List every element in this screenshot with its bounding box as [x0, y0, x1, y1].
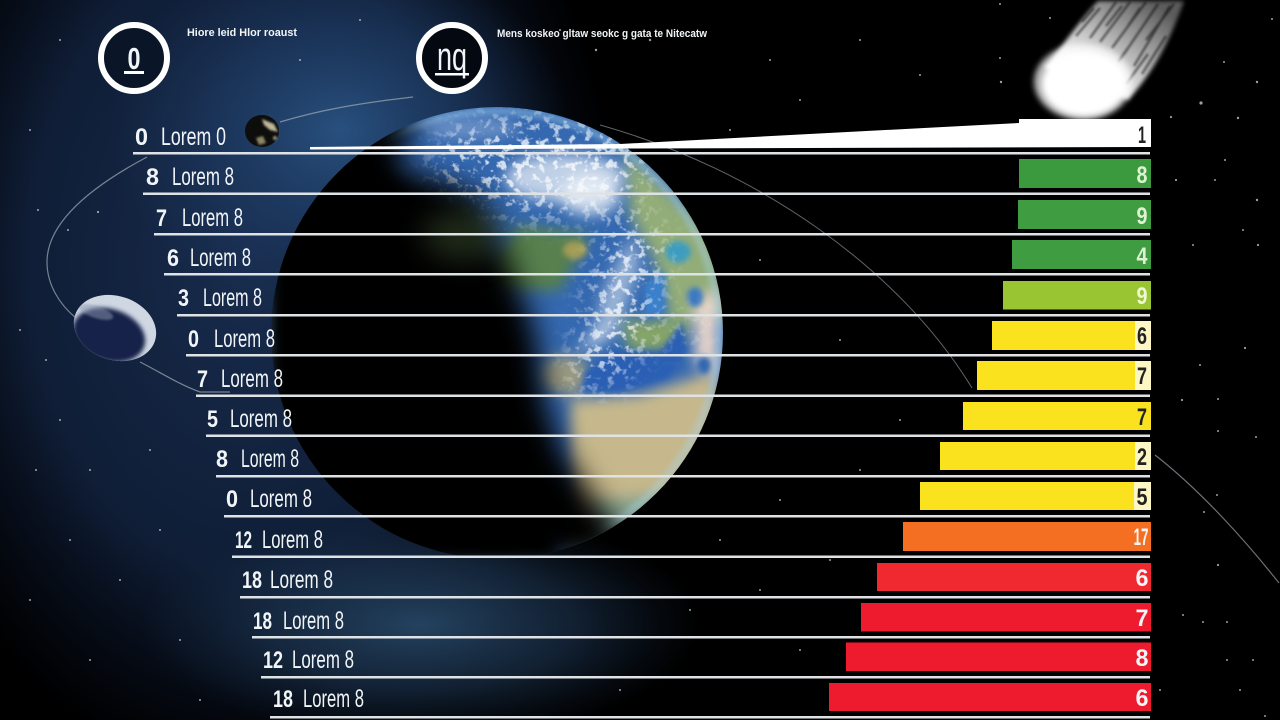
row 3: 9: [1136, 203, 1148, 230]
row 7: 7: [197, 366, 208, 393]
row 13: Lorem 8: [283, 607, 344, 635]
row 9: [216, 442, 1151, 478]
row 4: Lorem 8: [190, 244, 251, 272]
row 8: 7: [1137, 404, 1147, 431]
row 7: Lorem 8: [221, 365, 283, 393]
row 1: 1: [1138, 122, 1146, 149]
row 1: [133, 119, 1151, 154]
row 5: Lorem 8: [203, 284, 262, 312]
row 1: 0: [135, 124, 148, 151]
row 15: Lorem 8: [303, 685, 364, 713]
icon: comet: [1034, 1, 1184, 120]
heading: left: Hiore leid Hlor roaust: [187, 27, 297, 39]
row 3: Lorem 8: [182, 204, 243, 232]
icon badge: left: [101, 25, 167, 91]
row 12: 6: [1136, 565, 1148, 592]
night side: [272, 105, 630, 560]
icon badge: right: nq: [437, 35, 467, 79]
row 13: 7: [1136, 605, 1148, 632]
row 14: 12: [263, 647, 283, 674]
row 13: [252, 603, 1151, 638]
row 10: 5: [1136, 484, 1148, 511]
row 14: [261, 642, 1151, 678]
row 11: [232, 522, 1151, 558]
row 2: 8: [1136, 162, 1148, 189]
orbit lines: [47, 97, 1279, 583]
row 12: Lorem 8: [270, 566, 333, 594]
row 7: [196, 361, 1151, 397]
row 12: 18: [242, 567, 262, 594]
row 7: 7: [1137, 363, 1147, 390]
row 8: Lorem 8: [230, 405, 292, 433]
row 10: [224, 482, 1151, 518]
icon badge: left: 0: [128, 41, 140, 76]
row 11: 17: [1134, 524, 1148, 551]
row 2: Lorem 8: [172, 163, 234, 191]
land masses: [493, 150, 723, 547]
earth globe: [271, 104, 730, 560]
row 10: 0: [226, 486, 238, 513]
row 2: 8: [146, 164, 159, 191]
row 6: [186, 321, 1151, 356]
row 11: Lorem 8: [262, 526, 323, 554]
row 2: [143, 159, 1151, 195]
row 15: 6: [1136, 685, 1148, 712]
seas: [563, 241, 711, 392]
row 4: 4: [1136, 243, 1148, 270]
row 11: 12: [235, 527, 252, 554]
row 8: 5: [207, 406, 218, 433]
row 10: Lorem 8: [250, 485, 312, 513]
row 9: 2: [1137, 444, 1147, 471]
row 15: 18: [273, 686, 293, 713]
row 6: 6: [1137, 323, 1147, 350]
atmosphere rim: [275, 111, 719, 555]
row 3: 7: [156, 205, 167, 232]
clouds: [420, 118, 640, 352]
row 4: 6: [167, 245, 179, 272]
row 12: [240, 563, 1151, 598]
icon: moon: [74, 294, 156, 362]
row 9: Lorem 8: [241, 445, 299, 473]
heading: right: Mens koskeo gltaw seokc g gata te Nitecatw: [497, 28, 707, 40]
row 4: [164, 240, 1151, 276]
row 6: 0: [188, 326, 199, 353]
row 5: [177, 281, 1151, 316]
row 8: [206, 402, 1151, 437]
row 6: Lorem 8: [214, 325, 275, 353]
cloud speckle texture: [415, 107, 704, 404]
row 1: Lorem 0: [161, 123, 226, 151]
row 5: 3: [178, 285, 189, 312]
row 5: 9: [1136, 283, 1148, 310]
row 9: 8: [216, 446, 228, 473]
row 14: 8: [1136, 645, 1148, 672]
row 13: 18: [253, 608, 272, 635]
row 3: [154, 200, 1151, 236]
row 14: Lorem 8: [292, 646, 354, 674]
row 15: [270, 683, 1151, 718]
icon: asteroid: [245, 115, 279, 147]
icon badge: right: [419, 25, 485, 91]
